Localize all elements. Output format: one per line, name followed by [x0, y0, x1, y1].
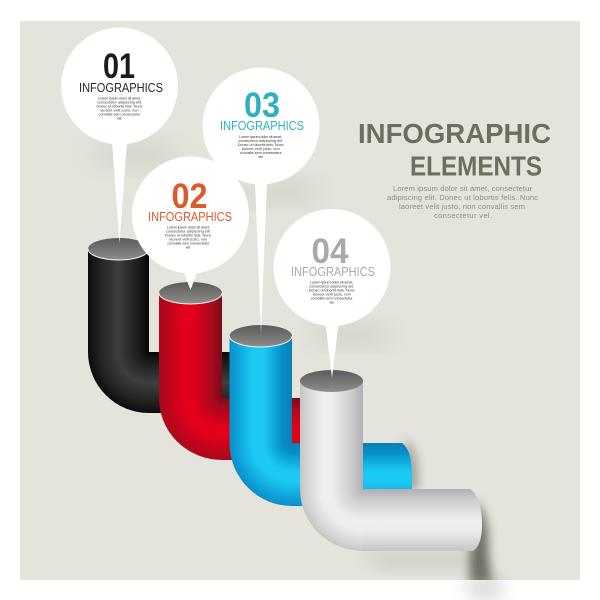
pipe 1: black — [88, 238, 239, 413]
text block 03: vel. — [258, 155, 263, 159]
text block 02: consectetur adipiscing elit. — [166, 230, 211, 234]
pipe 2 rim highlight — [159, 293, 222, 304]
text block 01 — [96, 96, 143, 120]
text block 01: Lorem ipsum dolor sit amet, — [98, 96, 141, 100]
number 03: 03 — [244, 86, 280, 125]
text block 02 — [165, 226, 211, 250]
text block 04: Lorem ipsum dolor sit amet, — [310, 281, 353, 285]
pipe 3: blue — [230, 325, 412, 506]
description text: laoreet velit justo, non convallis sem — [399, 202, 525, 211]
description text: consectetur vel. — [434, 211, 492, 220]
text block 04: consectetur adipiscing elit. — [309, 285, 354, 289]
label 02: INFOGRAPHICS — [148, 210, 232, 224]
text block 01: consectetur adipiscing elit. — [97, 100, 142, 104]
pipe 3 opening — [230, 325, 292, 347]
number 01: 01 — [103, 47, 135, 86]
description text: Lorem ipsum dolor sit amet, consectetur — [393, 184, 532, 193]
cast shadows — [89, 143, 505, 600]
text block 01: vel. — [117, 116, 122, 120]
bubble 1 — [61, 28, 178, 243]
text block 03: Lorem ipsum dolor sit amet, — [239, 135, 282, 139]
label 04: INFOGRAPHICS — [291, 265, 375, 279]
pipe 4: silver — [300, 370, 482, 551]
label 03: INFOGRAPHICS — [220, 119, 304, 133]
text block 04 — [309, 281, 355, 305]
text block 03: laoreet velit justo, non — [242, 147, 280, 151]
text block 02: Donec ut lobortis felis. Nunc — [165, 234, 211, 238]
pipe 4 opening — [300, 370, 363, 392]
title: INFOGRAPHIC — [358, 118, 551, 149]
text block 01: laoreet velit justo, non — [100, 108, 138, 112]
text block 04: convallis sem consectetur — [311, 297, 353, 301]
number 02: 02 — [172, 177, 208, 216]
text block 02: vel. — [186, 246, 191, 250]
title — [358, 118, 551, 182]
text block 03: Donec ut lobortis felis. Nunc — [238, 143, 284, 147]
description text — [387, 184, 538, 220]
bubble 2 — [132, 156, 249, 290]
bubble 3 — [202, 68, 320, 333]
text block 02: Lorem ipsum dolor sit amet, — [167, 226, 210, 230]
pipe 3 rim highlight — [230, 336, 292, 347]
text block 04: laoreet velit justo, non — [313, 293, 351, 297]
pipe 2 opening — [159, 282, 222, 304]
text block 02: convallis sem consectetur — [167, 242, 210, 246]
text block 04: Donec ut lobortis felis. Nunc — [309, 289, 355, 293]
pipe 1 opening — [88, 238, 149, 260]
text block 03 — [238, 135, 284, 159]
title: ELEMENTS — [410, 150, 542, 182]
pipe 2: red — [159, 282, 312, 460]
pipe 1 rim highlight — [88, 249, 149, 260]
description text: adipiscing elit. Donec ut lobortis felis. Nunc — [387, 193, 538, 202]
text block 03: consectetur adipiscing elit. — [238, 139, 283, 143]
bubble 4 — [274, 209, 390, 378]
text block 03: convallis sem consectetur — [240, 151, 282, 155]
text block 01: convallis sem consectetur — [98, 112, 141, 116]
text block 02: laoreet velit justo, non — [169, 238, 207, 242]
text block 01: Donec ut lobortis felis. Nunc — [96, 104, 143, 108]
number 04: 04 — [312, 232, 349, 271]
label 01: INFOGRAPHICS — [79, 81, 163, 95]
text block 04: vel. — [329, 301, 334, 305]
